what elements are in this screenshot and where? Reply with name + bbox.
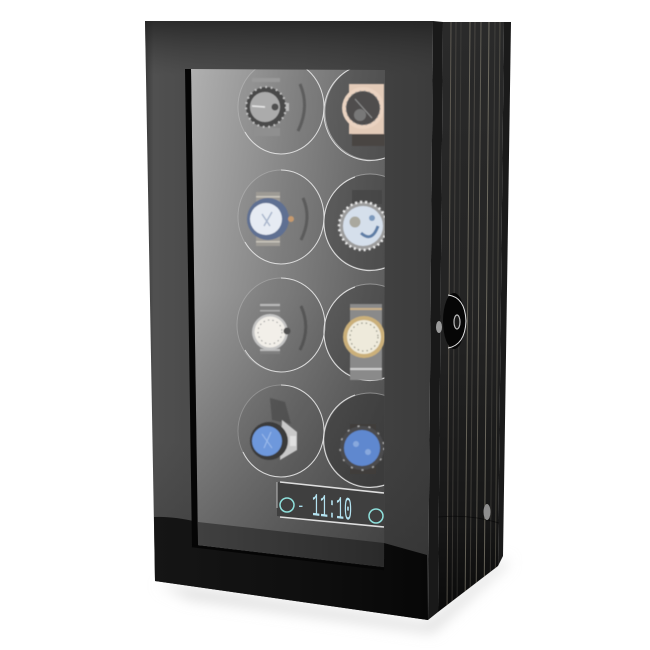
watch row 2 left <box>247 192 307 246</box>
clock dash: - <box>297 496 305 517</box>
glass lower dark reflection <box>198 522 384 567</box>
winder cup row 2 right <box>323 174 385 272</box>
lock knob <box>436 293 466 349</box>
digital display panel <box>277 482 384 530</box>
glass bottom edge <box>192 546 384 569</box>
glass door <box>185 69 385 569</box>
wood grain stripes <box>447 22 500 612</box>
watches grid <box>236 70 385 488</box>
winder cup row 4 left <box>238 385 324 477</box>
winder cup row 3 right <box>323 284 384 382</box>
winder cup row 3 left <box>237 278 325 372</box>
side screw <box>484 504 490 520</box>
winder cup row 1 left <box>238 60 324 154</box>
side base break line <box>438 516 499 523</box>
knob inner ring <box>454 315 460 329</box>
watch row 2 right <box>339 190 387 250</box>
cabinet front frame <box>145 21 433 620</box>
touch button left <box>280 498 294 512</box>
floor shadow <box>158 560 509 632</box>
watch row 1 left <box>246 78 305 136</box>
winder cup row 4 right <box>323 392 384 488</box>
winder cup row 2 left <box>238 170 324 264</box>
winder cup row 1 right <box>323 70 385 162</box>
cabinet corner strip <box>428 21 443 620</box>
lock button <box>436 321 442 333</box>
glass left inner edge <box>185 69 198 546</box>
watch row 3 right <box>343 304 385 380</box>
watch row 4 right <box>340 424 384 474</box>
cabinet side panel with wood grain <box>438 22 511 612</box>
gloss black base of frame <box>154 517 428 620</box>
watch row 3 left <box>252 302 306 354</box>
clock readout: 11:10 <box>312 489 352 530</box>
watch row 1 right <box>342 84 385 146</box>
side rear strip <box>498 22 511 566</box>
touch button right <box>369 509 383 523</box>
watch row 4 left <box>250 398 297 460</box>
product illustration: watch winder cabinet <box>145 21 511 636</box>
